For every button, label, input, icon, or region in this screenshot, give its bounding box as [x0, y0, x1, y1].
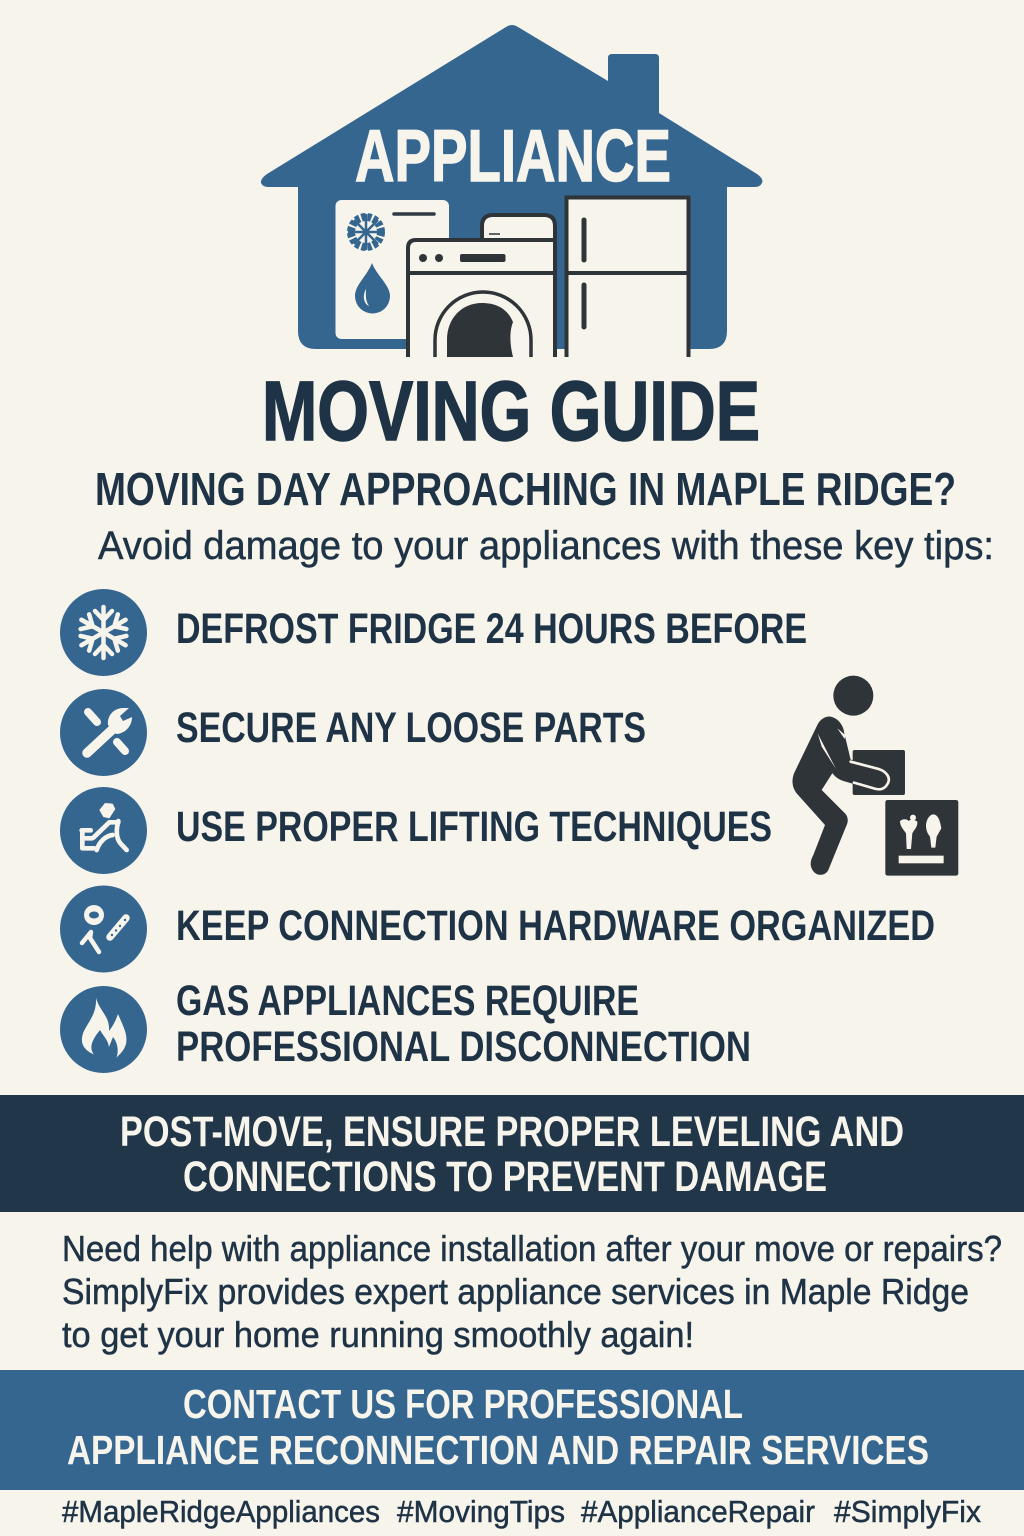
- tip 3: lifting: [60, 787, 772, 874]
- tip text, two lines: PROFESSIONAL DISCONNECTION: [176, 1023, 751, 1071]
- rear appliance: [482, 215, 555, 240]
- icon: connection hardware: [60, 886, 147, 972]
- title: moving guide: MOVING GUIDE: [262, 364, 760, 458]
- hashtags: [62, 1494, 981, 1529]
- hashtags: #SimplyFix: [834, 1494, 981, 1529]
- hashtags: #MovingTips: [397, 1494, 565, 1529]
- tip text: DEFROST FRIDGE 24 HOURS BEFORE: [176, 605, 807, 653]
- banner: contact: CONTACT US FOR PROFESSIONAL: [183, 1381, 743, 1427]
- washing machine: [408, 240, 556, 357]
- tip text: SECURE ANY LOOSE PARTS: [176, 704, 646, 752]
- tip 5: gas: [60, 977, 751, 1073]
- icon: snowflake: [60, 589, 147, 676]
- service paragraph: [62, 1228, 1002, 1355]
- tip text: USE PROPER LIFTING TECHNIQUES: [176, 803, 772, 851]
- banner: contact: [0, 1370, 1024, 1490]
- house illustration with appliances: [261, 25, 762, 358]
- banner: post-move: CONNECTIONS TO PREVENT DAMAGE: [183, 1153, 827, 1201]
- refrigerator: [566, 198, 688, 358]
- small box with this-way-up symbol: [885, 800, 958, 876]
- tip text, two lines: [176, 977, 751, 1071]
- icon: flame: [60, 986, 147, 1073]
- banner: post-move: [0, 1095, 1024, 1212]
- tip 4: hardware: [60, 886, 935, 972]
- house shape: [261, 25, 762, 349]
- hashtags: #MapleRidgeAppliances: [62, 1494, 380, 1529]
- panel appliance with snow and drop: [336, 200, 449, 339]
- icon: person lifting box beside packing symbol: [792, 676, 958, 876]
- intro line: Avoid damage to your appliances with these key tips:: [98, 524, 994, 568]
- service paragraph: SimplyFix provides expert appliance services in Maple Ridge: [62, 1271, 969, 1312]
- heading: appliance: APPLIANCE: [355, 116, 671, 197]
- service paragraph: to get your home running smoothly again!: [62, 1314, 694, 1355]
- tip 1: defrost: [60, 589, 807, 676]
- icon: person lifting: [60, 787, 147, 874]
- hashtags: #ApplianceRepair: [581, 1494, 815, 1529]
- tip text, two lines: GAS APPLIANCES REQUIRE: [176, 977, 639, 1025]
- tip 2: secure parts: [60, 689, 646, 776]
- icon: wrench and screwdriver: [60, 689, 147, 776]
